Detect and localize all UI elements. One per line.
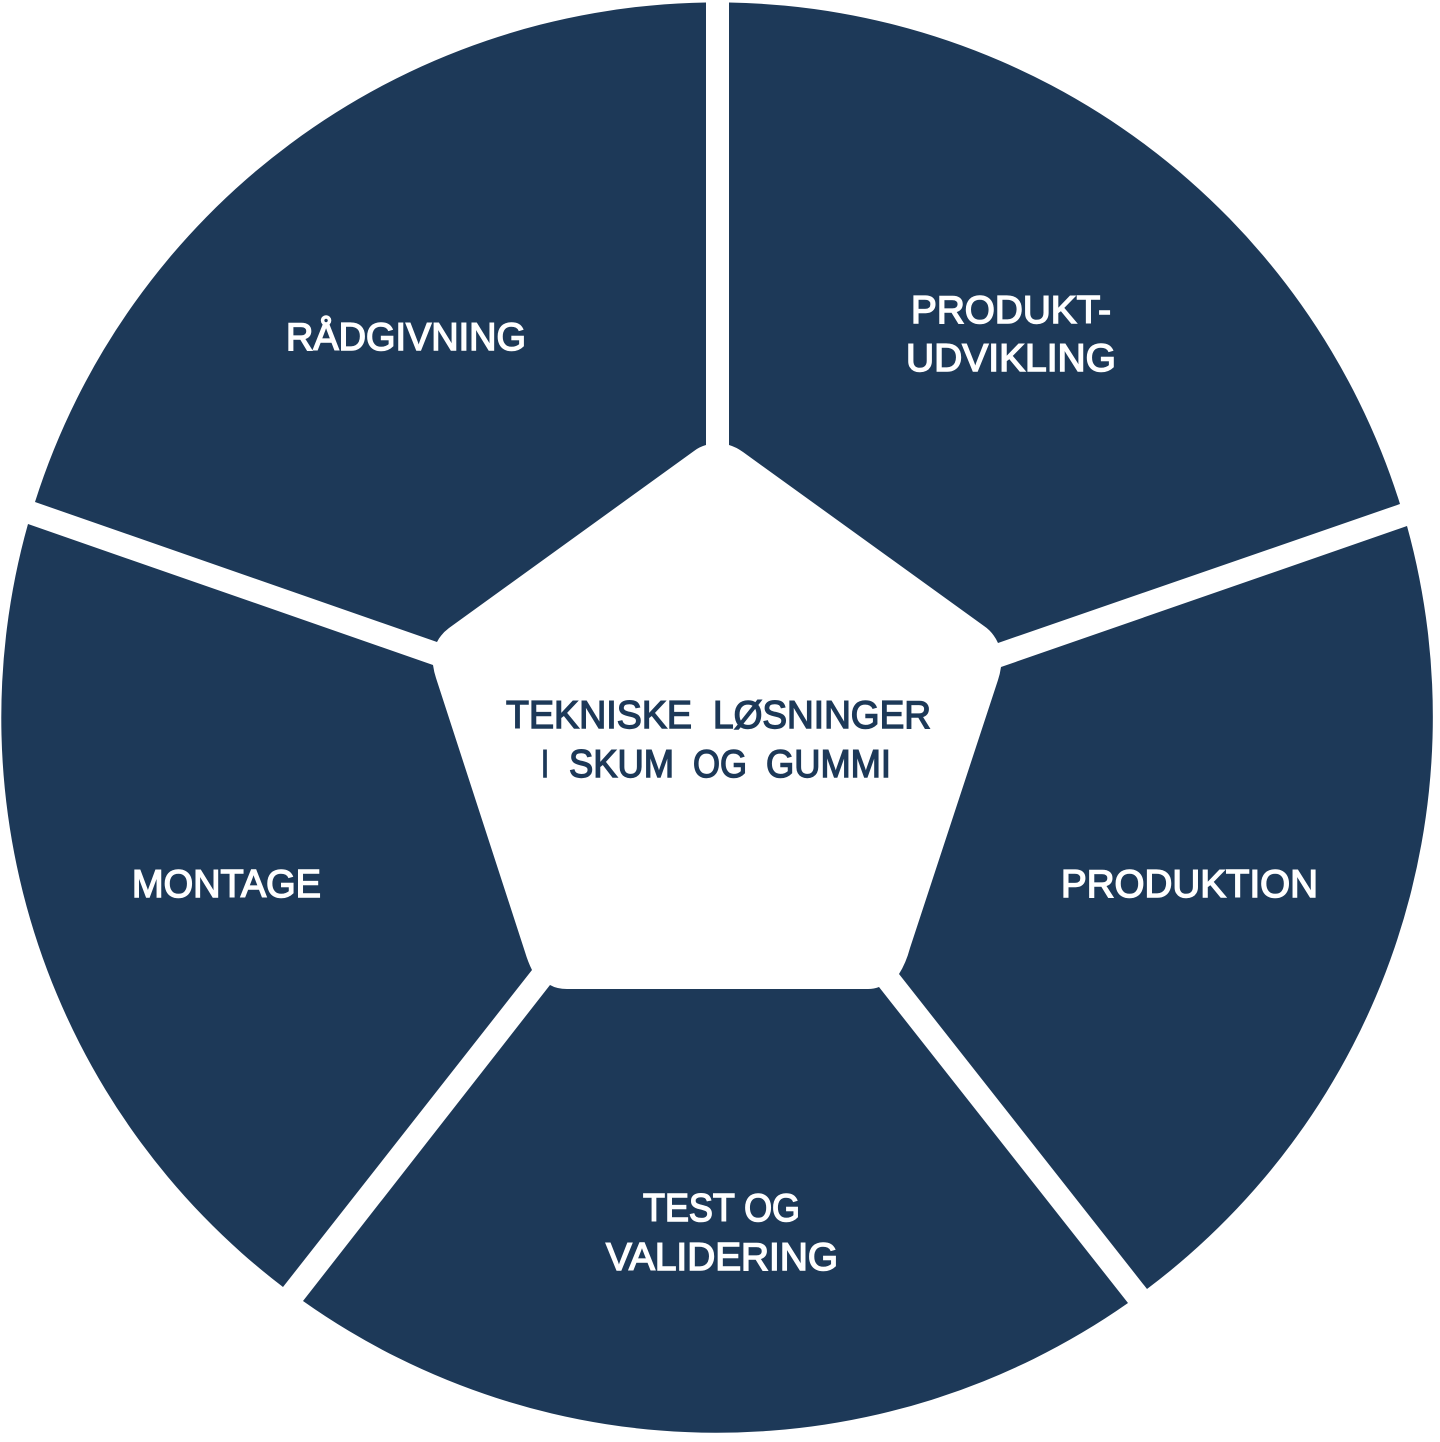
center label: OG bbox=[693, 743, 747, 786]
center label: LØSNINGER bbox=[713, 694, 931, 737]
center label bbox=[506, 694, 931, 786]
center label: I bbox=[541, 743, 549, 786]
segment: Test og validering: VALIDERING bbox=[606, 1236, 838, 1279]
segment: Test og validering: TEST OG bbox=[643, 1187, 800, 1230]
segment: Montage: MONTAGE bbox=[132, 863, 321, 906]
center label: GUMMI bbox=[766, 743, 891, 786]
segment: Montage bbox=[1, 524, 532, 1287]
segment: Rådgivning bbox=[35, 2, 706, 642]
segment: Test og validering bbox=[303, 985, 1128, 1433]
segment: Produktion: PRODUKTION bbox=[1061, 863, 1318, 906]
center label: TEKNISKE bbox=[506, 694, 692, 737]
center label: SKUM bbox=[569, 743, 674, 786]
segment: Rådgivning: RÅDGIVNING bbox=[286, 315, 526, 359]
segment: Produktudvikling bbox=[729, 2, 1400, 643]
segment: Produktudvikling: UDVIKLING bbox=[906, 337, 1116, 380]
segment: Produktudvikling: PRODUKT- bbox=[911, 289, 1111, 332]
segment: Produktion bbox=[899, 526, 1433, 1289]
